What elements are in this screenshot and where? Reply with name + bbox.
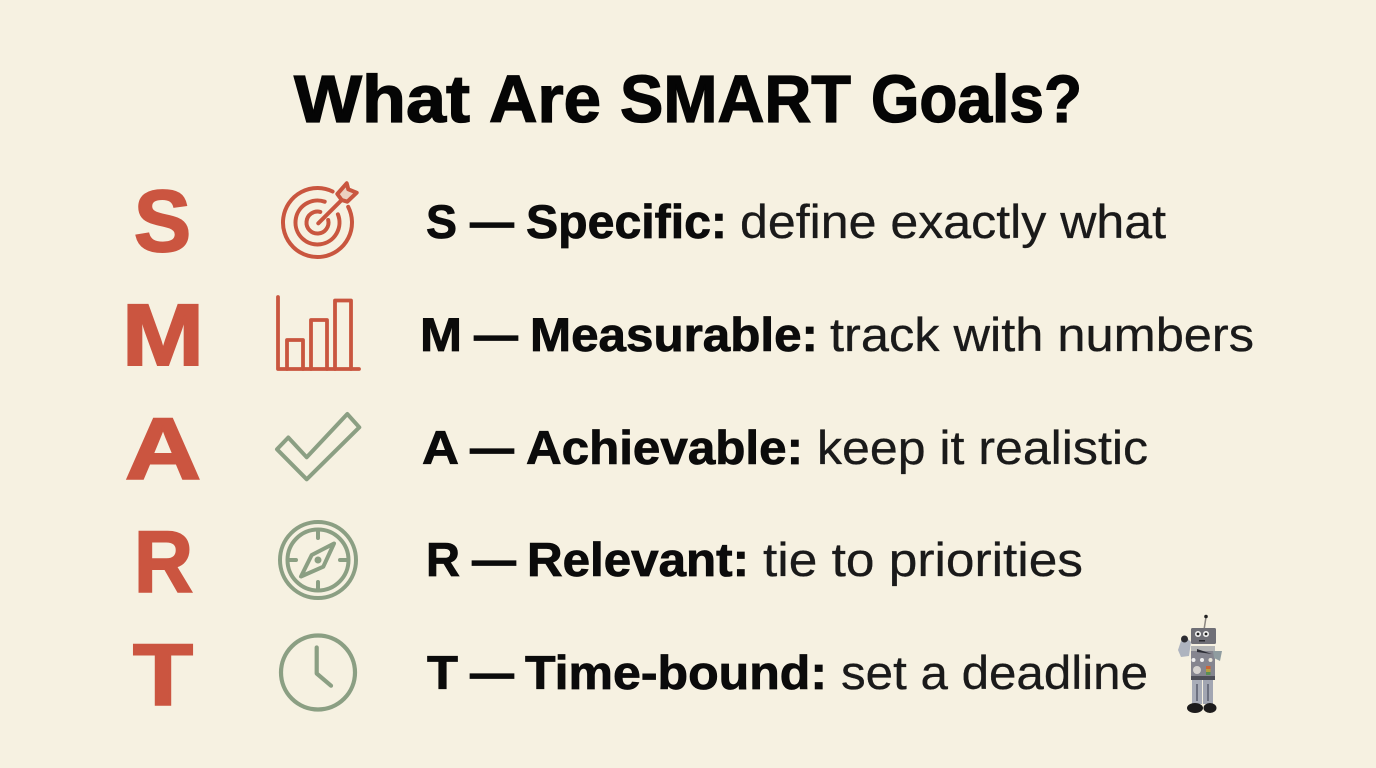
letter A: A [125, 401, 201, 498]
row M text: M [420, 308, 462, 361]
row A text: keep it realistic [817, 421, 1148, 474]
row S text: Specific: [526, 195, 727, 248]
icon: bar chart [278, 297, 359, 369]
letter T: T [133, 627, 193, 724]
row S text: — [470, 195, 514, 248]
icon: compass [280, 522, 356, 598]
title: What [294, 62, 470, 137]
row A text: — [470, 421, 514, 474]
row T text: set a deadline [841, 646, 1148, 699]
row R text [426, 533, 1083, 586]
icon: target with arrow [283, 183, 357, 257]
row R text: Relevant: [527, 533, 749, 586]
row S text [426, 195, 1166, 248]
row A text [422, 421, 1148, 474]
row S text: S [426, 195, 457, 248]
row T text: Time-bound: [525, 646, 827, 699]
letter M: M [122, 287, 204, 384]
row A text: A [422, 421, 459, 474]
letter S: S [134, 173, 191, 270]
row R text: R [426, 533, 460, 586]
icon: clock [281, 636, 355, 710]
icon: robot mascot [1178, 615, 1222, 713]
row M text [420, 308, 1254, 361]
row M text: Measurable: [530, 308, 818, 361]
row M text: track with numbers [830, 308, 1254, 361]
row T text: T [427, 646, 458, 699]
icon: check mark [277, 414, 359, 479]
row A text: Achievable: [526, 421, 803, 474]
row T text: — [470, 646, 514, 699]
row M text: — [474, 308, 518, 361]
row S text: define exactly what [740, 195, 1166, 248]
title [294, 62, 1082, 137]
row T text [427, 646, 1148, 699]
row R text: tie to priorities [763, 533, 1083, 586]
row R text: — [472, 533, 516, 586]
letter R: R [134, 514, 193, 611]
title: SMART [620, 62, 851, 137]
title: Are [489, 62, 601, 137]
title: Goals? [871, 62, 1082, 137]
